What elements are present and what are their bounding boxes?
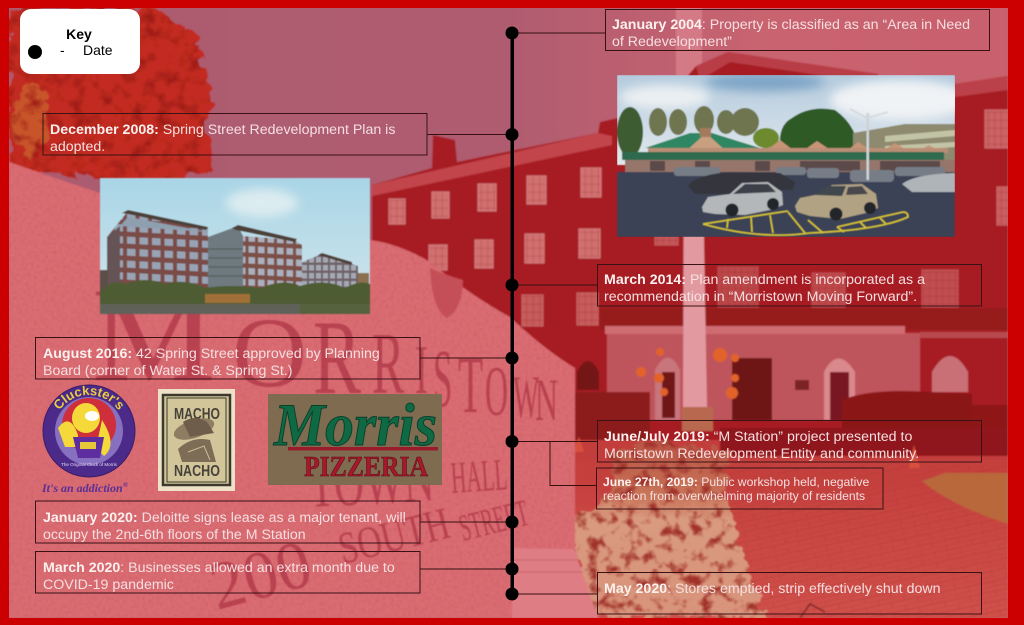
engraved text: MORRISTOWN: W	[513, 364, 539, 431]
event: August 2016	[36, 338, 420, 379]
photo: office building rendering	[100, 178, 370, 314]
engraved text: MORRISTOWN: R	[313, 298, 362, 416]
key legend: Key	[66, 26, 92, 42]
event: March 2020: COVID-19 pandemic	[43, 577, 174, 593]
event: January 2004: January 2004: Property is classified as an “Area in Need	[612, 17, 970, 33]
engraved text: TOWN HALL	[307, 440, 509, 523]
engraved text: MORRISTOWN: O	[232, 298, 307, 409]
event: June/July 2019: Morristown Redevelopment Entity and community.	[604, 446, 919, 462]
stone carved oval	[430, 268, 463, 318]
event: March 2014: March 2014: Plan amendment is incorporated as a	[604, 272, 925, 288]
event: June 27th 2019	[596, 468, 883, 509]
event: March 2014: recommendation in “Morristown Moving Forward”.	[604, 289, 917, 305]
event: June/July 2019: June/July 2019: “M Station” project presented to	[604, 429, 912, 445]
timeline axis	[510, 33, 514, 594]
flowering shrub	[572, 442, 765, 617]
engraved text: MORRISTOWN: O	[485, 352, 508, 430]
pavement	[575, 440, 1008, 618]
engraved text: 200 SOUTH STREET	[201, 492, 533, 624]
engraved text: 200 SOUTH STREET: SOUTH	[333, 498, 455, 574]
dark band under upper storey	[600, 308, 1008, 330]
apartments	[853, 124, 955, 160]
engraved text: 200 SOUTH STREET: STREET	[455, 492, 533, 550]
engraved text: MORRISTOWN: S	[433, 332, 452, 424]
event: December 2008: December 2008: Spring Street Redevelopment Plan is	[50, 122, 395, 138]
event: August 2016: August 2016: 42 Spring Street approved by Planning	[43, 346, 380, 362]
key legend: -	[60, 42, 65, 58]
logo: Cluckster's: Cluckster's	[54, 386, 123, 410]
logo: Morris Pizzeria: PIZZERIA	[304, 452, 429, 483]
event: March 2020	[36, 552, 420, 593]
building windows	[389, 110, 1009, 326]
key legend: Date	[83, 42, 113, 58]
orange lilies	[636, 348, 739, 399]
engraved text: TOWN HALL: TOWN	[307, 440, 436, 523]
hedges	[575, 392, 650, 440]
engraved text: MORRISTOWN: R	[372, 316, 405, 413]
event: May 2020	[598, 572, 982, 614]
logo: Macho Nacho: NACHO	[174, 463, 220, 480]
event: June 27th 2019: June 27th, 2019: Public workshop held, negative	[603, 475, 869, 489]
logo: Morris Pizzeria: Morris	[273, 392, 437, 458]
logo: Cluckster's: The Original Cluck of Morris	[61, 462, 118, 467]
distant trees	[649, 106, 759, 136]
flag pole upper	[676, 0, 702, 130]
event: June 27th 2019: reaction from overwhelming majority of residents	[603, 489, 865, 503]
logo: Cluckster's	[42, 384, 136, 495]
store row	[645, 133, 760, 148]
logo: Macho Nacho	[158, 389, 235, 491]
event: January 2020: occupy the 2nd-6th floors of the M Station	[43, 527, 306, 543]
logo: Morris Pizzeria	[268, 392, 442, 485]
event: January 2020	[36, 501, 420, 543]
photo: strip mall parking lot	[617, 73, 970, 237]
autumn tree	[9, 9, 213, 185]
stone sign	[9, 162, 598, 618]
timeline connectors	[420, 33, 605, 594]
event: January 2004	[606, 10, 990, 50]
dark hedge base	[720, 428, 1008, 456]
logo: Macho Nacho: MACHO	[174, 406, 220, 423]
building: main brick facade	[372, 52, 1008, 470]
key legend	[20, 9, 140, 74]
grass	[922, 473, 1008, 524]
event: May 2020: May 2020: Stores emptied, strip effectively shut down	[604, 581, 940, 597]
engraved text: MORRISTOWN	[92, 260, 558, 434]
event: December 2008: adopted.	[50, 139, 105, 155]
timeline date markers	[506, 26, 518, 600]
parking lot	[617, 172, 955, 237]
engraved text: MORRISTOWN: I	[415, 332, 428, 409]
logo: Cluckster's: It's an addiction	[42, 481, 123, 495]
traffic cones	[573, 437, 920, 468]
event: March 2014	[598, 264, 982, 306]
event: August 2016: Board (corner of Water St. & Spring St.)	[43, 363, 292, 379]
engraved text: MORRISTOWN: M	[92, 260, 216, 410]
door and arched windows	[577, 356, 968, 420]
event: December 2008	[43, 114, 427, 155]
yellow hatch markings	[703, 211, 908, 235]
logo: Cluckster's: ®	[123, 481, 129, 489]
gold car	[795, 184, 878, 219]
event: January 2004: of Redevelopment”	[612, 34, 732, 50]
silver car	[702, 182, 783, 215]
flag pole lower	[683, 130, 707, 407]
engraved text: TOWN HALL: HALL	[449, 449, 509, 503]
engraved text: 200 SOUTH STREET: 200	[201, 525, 319, 624]
lower town hall facade	[607, 333, 920, 420]
event: January 2020: January 2020: Deloitte signs lease as a major tenant, will	[43, 510, 406, 526]
engraved text: MORRISTOWN: T	[458, 340, 483, 431]
event: March 2020: March 2020: Businesses allowed an extra month due to	[43, 560, 395, 576]
engraved text: MORRISTOWN: N	[535, 368, 558, 434]
event: June/July 2019	[598, 420, 982, 462]
